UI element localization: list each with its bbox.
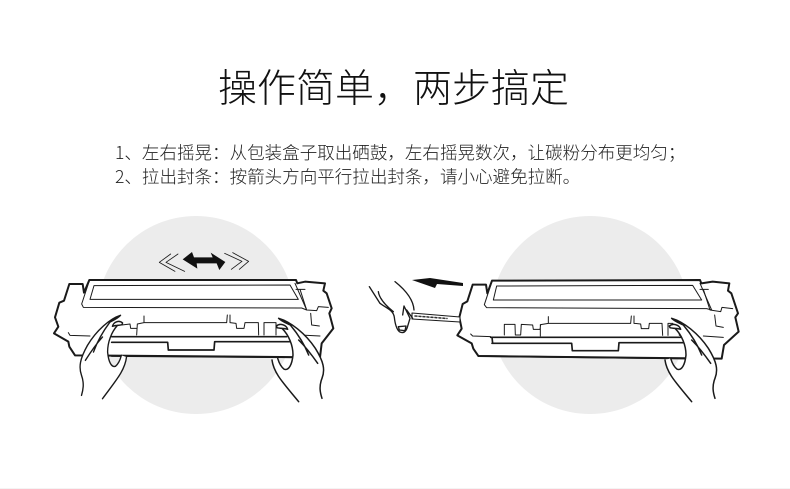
cartridge right bbox=[457, 280, 739, 359]
grey circle right bbox=[491, 216, 689, 414]
latch details right bbox=[504, 316, 679, 336]
cartridge body left bbox=[54, 280, 333, 357]
latch details left bbox=[122, 315, 276, 335]
lid right bbox=[471, 281, 733, 337]
strip dashes bbox=[415, 316, 447, 318]
cartridge body right bbox=[457, 280, 739, 359]
sealing strip bbox=[412, 313, 460, 322]
step 1 text: 1、左右摇晃：从包装盒子取出硒鼓，左右摇晃数次，让碳粉分布更均匀； bbox=[115, 140, 685, 165]
grey circle left bbox=[97, 216, 295, 414]
double arrow solid bbox=[183, 252, 225, 270]
drum bar right bbox=[478, 337, 697, 359]
lid left bbox=[68, 281, 328, 336]
title: 操作简单，两步搞定 bbox=[218, 58, 569, 114]
pull arrow bbox=[412, 278, 463, 288]
drum bar left bbox=[112, 337, 292, 357]
left hand on left cartridge bbox=[80, 315, 126, 399]
strip bbox=[412, 313, 460, 322]
pulling hand bbox=[369, 282, 414, 333]
chevrons bbox=[159, 253, 249, 271]
cartridge left bbox=[54, 252, 333, 357]
step 2 text: 2、拉出封条：按箭头方向平行拉出封条，请小心避免拉断。 bbox=[115, 164, 580, 189]
bottom rule bbox=[0, 488, 790, 489]
right hand on left cartridge bbox=[272, 318, 324, 402]
hand on right cartridge bbox=[665, 318, 717, 402]
shake arrows bbox=[159, 252, 249, 271]
